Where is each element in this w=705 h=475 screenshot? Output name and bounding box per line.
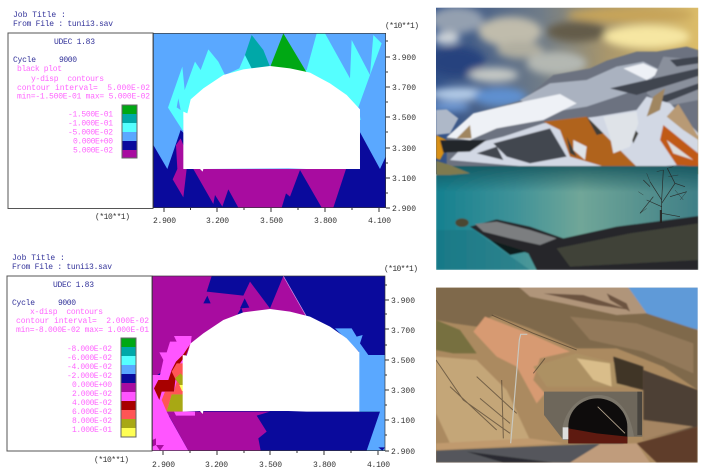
info panel: contour interval= 5.000E-02 [17, 84, 150, 93]
axis unit label: (*10**1) [94, 456, 129, 465]
info panel: 9000 [59, 56, 77, 65]
axes: 3.100 [391, 417, 415, 426]
axes [153, 22, 419, 226]
legend: -6.000E-02 [67, 354, 112, 363]
axes: 2.900 [152, 461, 175, 470]
info panel: x-disp contours [30, 308, 103, 317]
axes: 3.200 [206, 217, 229, 226]
axes: 3.700 [392, 84, 416, 93]
axes: 3.200 [205, 461, 228, 470]
info panel: y-disp contours [31, 75, 104, 84]
job header: From File : tunii3.sav [12, 263, 112, 272]
info panel: Cycle [13, 56, 36, 65]
axes: 3.800 [313, 461, 336, 470]
photo: tunnel portal [436, 285, 700, 463]
contour plot [152, 276, 385, 451]
axes [152, 265, 418, 470]
info panel: black plot [17, 65, 62, 74]
legend: -8.000E-02 [67, 345, 112, 354]
axes: 3.500 [391, 357, 415, 366]
photo: mountain lake [428, 7, 698, 270]
axes: 3.700 [391, 327, 415, 336]
job header: Job Title : [12, 254, 65, 263]
info panel: 9000 [58, 299, 76, 308]
street lamp [511, 334, 527, 443]
legend: -1.000E-01 [68, 120, 113, 128]
legend: -5.000E-02 [68, 128, 113, 138]
job header [13, 11, 113, 29]
axes: 3.300 [391, 387, 415, 396]
info panel: Cycle [12, 299, 35, 308]
axes: 3.500 [392, 114, 416, 123]
axes: 2.900 [391, 448, 415, 457]
axes: 3.900 [391, 297, 415, 306]
chart: x-displacement contours [7, 254, 418, 470]
legend: -2.000E-02 [67, 372, 112, 381]
axes: 3.100 [392, 175, 416, 184]
legend: -1.500E-01 [68, 110, 113, 120]
info panel [7, 276, 152, 451]
info panel: contour interval= 2.000E-02 [16, 317, 149, 326]
axes: 3.500 [260, 217, 283, 226]
info panel: UDEC 1.83 [54, 38, 95, 47]
job header: From File : tunii3.sav [13, 20, 113, 29]
legend: 0.000E+00 [72, 381, 112, 390]
legend: 6.000E-02 [72, 408, 112, 417]
axes: 4.100 [368, 217, 391, 226]
legend: 4.000E-02 [72, 399, 112, 408]
axes: (*10**1) [384, 265, 418, 274]
info panel: min=-1.500E-01 max= 5.000E-02 [17, 92, 150, 102]
axes: 3.500 [259, 461, 282, 470]
legend: 2.000E-02 [72, 390, 112, 399]
chart: y-displacement contours [8, 11, 419, 226]
info panel: UDEC 1.83 [53, 281, 94, 290]
contour plot [153, 33, 386, 208]
legend: 5.000E-02 [73, 146, 113, 156]
axes: 2.900 [392, 205, 416, 214]
axes: 4.100 [367, 461, 390, 470]
legend: 0.000E+00 [73, 138, 113, 146]
axes: 3.900 [392, 54, 416, 63]
axes: (*10**1) [385, 22, 419, 31]
job header: Job Title : [13, 11, 66, 20]
legend: 8.000E-02 [72, 417, 112, 426]
job header [12, 254, 112, 272]
axes: 3.800 [314, 217, 337, 226]
legend: -4.000E-02 [67, 363, 112, 372]
tree [638, 167, 687, 223]
axes: 2.900 [153, 217, 176, 226]
legend [67, 338, 136, 437]
legend: 1.000E-01 [72, 426, 112, 435]
axes: 3.300 [392, 145, 416, 154]
legend [68, 105, 137, 158]
info panel [8, 33, 153, 208]
info panel: min=-8.000E-02 max= 1.000E-01 [16, 326, 149, 335]
tunnel portal [544, 392, 642, 443]
axis unit label: (*10**1) [95, 213, 130, 222]
